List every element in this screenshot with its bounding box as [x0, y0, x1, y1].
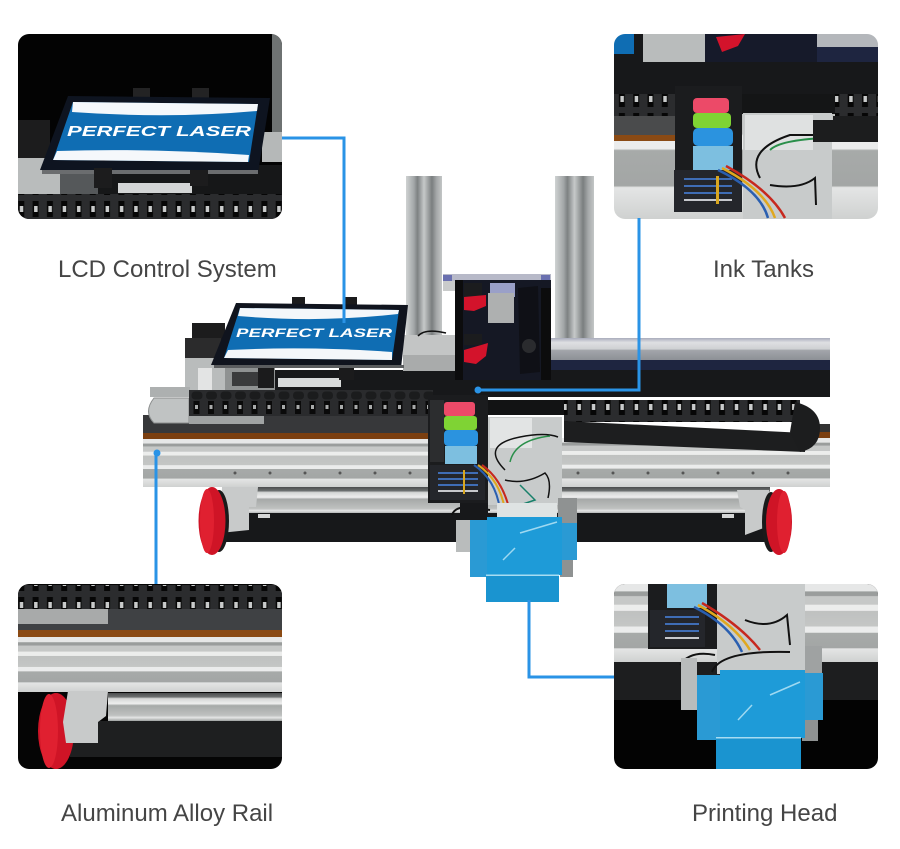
vertical aluminium posts	[406, 176, 594, 340]
panel: ink tanks thumbnail	[614, 34, 878, 219]
carriage black plate with red handles	[455, 280, 551, 380]
blue printing head	[456, 517, 577, 602]
carriage with wiring	[452, 417, 577, 523]
thumbnail logo text: PERFECT LASER	[67, 123, 251, 140]
label: Ink Tanks: Ink Tanks	[713, 256, 814, 283]
red wheels	[198, 487, 792, 555]
panel: LCD control system thumbnail	[18, 34, 282, 219]
blue tank	[444, 430, 478, 446]
connector: printing head	[529, 600, 614, 677]
connector: LCD control system	[282, 138, 344, 323]
drag chain	[148, 387, 820, 452]
connector: ink tanks	[474, 218, 639, 394]
label: Aluminum Alloy Rail: Aluminum Alloy Rail	[61, 800, 273, 827]
green tank	[444, 416, 477, 430]
ink tank housing	[428, 395, 488, 503]
upper beam	[274, 331, 830, 397]
main aluminium rail	[143, 415, 830, 487]
connector: aluminum alloy rail	[154, 450, 160, 584]
lower rail and black tube	[220, 487, 770, 542]
monitor logo text: PERFECT LASER	[236, 328, 393, 340]
left end module	[185, 323, 341, 390]
pink tank	[444, 402, 475, 416]
label: Printing Head: Printing Head	[692, 800, 837, 827]
panel: central machine photo	[143, 176, 830, 602]
panel: printing head thumbnail	[614, 584, 878, 769]
label: LCD Control System: LCD Control System	[58, 256, 277, 283]
panel: aluminum alloy rail thumbnail	[18, 584, 282, 769]
LCD monitor	[211, 297, 408, 388]
